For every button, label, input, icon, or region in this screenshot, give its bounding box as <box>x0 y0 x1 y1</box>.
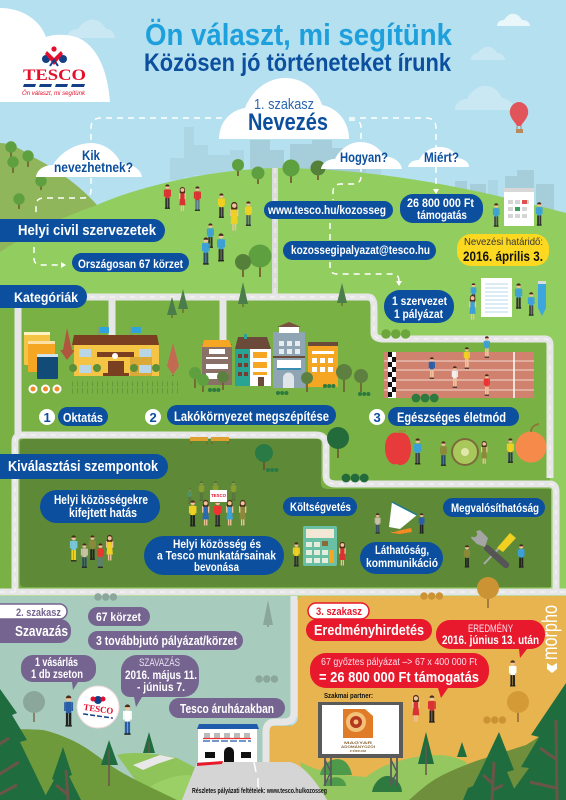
pill: Megvalósíthatóság <box>443 498 545 517</box>
deadline badge: 2016. április 3. <box>463 248 543 264</box>
road over zones <box>266 596 294 765</box>
pill: Helyi közösség és <box>144 536 284 575</box>
label: 3 Egészséges: Egészséges életmód <box>397 409 506 425</box>
pill: 3. szakasz <box>308 603 369 619</box>
label: 2 Lakókörnyezet: Lakókörnyezet megszépítése <box>174 408 329 424</box>
pill: Láthatóság: kommunikáció <box>366 556 438 570</box>
pill: támogatás: támogatás <box>417 208 467 222</box>
bubble: 1 vásárlás: 1 db zseton <box>31 667 83 681</box>
pill: email: kozossegipalyazat@tesco.hu <box>291 243 430 257</box>
icon: books <box>24 332 60 392</box>
cloud: Kik nevezhetnek <box>36 143 142 177</box>
people: first stage <box>164 184 252 265</box>
pill: 1 szervezet: 1 pályázat <box>394 307 443 321</box>
zone: voting <box>0 596 291 800</box>
icon: calculator with people <box>293 526 346 566</box>
pill: Helyi közösség és: bevonása <box>194 560 239 574</box>
trees on main hill <box>232 159 326 277</box>
bubble: total: = 26 800 000 Ft támogatás <box>319 669 479 686</box>
pill: Kategóriák <box>0 285 87 308</box>
pill: Szavazás <box>0 619 71 643</box>
pill: website: www.tesco.hu/kozosseg <box>267 203 386 217</box>
logo: Tesco: TESCO <box>23 67 86 84</box>
pill: Tesco áruházakban: Tesco áruházakban <box>180 701 274 716</box>
label: 1 Oktatás <box>39 407 108 426</box>
bubble: Szavazás dates: 2016. május 11. <box>125 668 197 682</box>
roads <box>0 168 566 592</box>
pill: website <box>264 201 393 219</box>
pill: 1 szervezet: 1 szervezet <box>392 294 447 308</box>
decorative clouds <box>67 14 530 110</box>
pill: Eredményhirdetés: Eredményhirdetés <box>314 622 424 639</box>
fruits and people <box>342 424 546 482</box>
pill: Láthatóság: Láthatóság, <box>375 543 429 557</box>
logo: Tesco: Ön választ, mi segítünk <box>22 90 86 97</box>
deadline badge: Nevezési határidő: <box>464 236 543 248</box>
label: Szakmai partner: Szakmai partner: <box>324 693 373 700</box>
token with people <box>64 686 132 735</box>
pine trees <box>0 683 566 800</box>
pill: 3. szakasz: 3. szakasz <box>316 606 362 618</box>
decorations: voting zone <box>23 593 278 722</box>
token with people: TESCO <box>83 702 114 716</box>
label: 1 Oktatás: Oktatás <box>63 410 103 425</box>
title <box>144 17 453 77</box>
pill: Kategóriák: Kategóriák <box>14 289 78 305</box>
title: Közösen jó történeteket írunk <box>144 49 451 77</box>
bubble: Eredmény date: EREDMÉNY <box>468 622 513 635</box>
benches and trees <box>190 427 349 472</box>
pines along road <box>167 282 410 339</box>
title: Ön választ, mi segítünk <box>145 17 453 52</box>
deadline badge <box>457 234 549 266</box>
bubble: total <box>310 653 489 698</box>
dashed connectors <box>34 118 439 286</box>
pill: Helyi közösség és: a Tesco munkatársainak <box>157 548 276 562</box>
people with Tesco sign <box>188 481 246 526</box>
pill: Helyi civil szervezetek: Helyi civil szervezetek <box>18 222 157 239</box>
pill: 67 körzet: 67 körzet <box>96 610 141 624</box>
pill: Helyi közösségekre: Helyi közösségekre <box>54 492 148 507</box>
bottom hills <box>0 720 566 800</box>
pill: Helyi civil szervezetek <box>0 219 165 242</box>
school <box>60 327 179 391</box>
calendar with people <box>493 188 543 227</box>
cloud: Nevezés: 1. szakasz <box>254 96 314 113</box>
pill: Kiválasztási szempontok <box>0 454 168 479</box>
pill: Költségvetés: Költségvetés <box>290 500 351 514</box>
cloud: Hogyan <box>321 142 402 169</box>
pill: Eredményhirdetés <box>306 619 432 641</box>
buildings <box>189 322 370 396</box>
billboard: ADOMÁNYOZÓI <box>341 744 375 749</box>
store <box>197 724 259 766</box>
icon: megaphone with people <box>375 502 425 534</box>
icon: tools with people <box>464 530 525 568</box>
footer note: Részletes pályázati feltételek: www.tesco.hu/kozosseg <box>192 788 327 795</box>
cloud: Miért <box>408 147 469 167</box>
bubble: Szavazás dates: SZAVAZÁS <box>139 656 180 669</box>
background: sky <box>0 0 566 300</box>
pill: Láthatóság <box>360 542 443 574</box>
people with Tesco sign: TESCO <box>211 493 226 498</box>
document with people and pencil <box>469 278 546 320</box>
left hill <box>0 143 97 260</box>
label: 3 Egészséges: 3 <box>374 410 381 425</box>
pill: 67 körzet <box>88 607 150 626</box>
label: 2 Lakókörnyezet: 2 <box>150 410 157 425</box>
logo: morpho <box>539 605 562 673</box>
main hill <box>0 168 566 600</box>
pill: továbbjutó: 3 továbbjutó pályázat/körzet <box>96 633 238 648</box>
logo: Tesco <box>22 46 86 97</box>
icon: hot air balloon <box>510 102 528 133</box>
billboard: MAGYAR <box>344 741 373 745</box>
pill: Tesco áruházakban <box>169 698 285 718</box>
pill: Országosan 67 körzet: Országosan 67 körzet <box>78 257 183 271</box>
billboard <box>318 702 403 792</box>
panel: selection criteria <box>20 439 551 587</box>
bubble: Eredmény date <box>436 620 545 658</box>
pill: Helyi közösségekre: kifejtett hatás <box>69 505 137 520</box>
logo cloud <box>0 8 110 102</box>
pill: támogatás: 26 800 000 Ft <box>407 196 474 210</box>
cloud: Nevezés: Nevezés <box>248 109 328 136</box>
people near results <box>412 660 516 723</box>
bubble: 1 vásárlás: 1 vásárlás <box>35 655 78 669</box>
pill: 2. szakasz: 2. szakasz <box>16 607 61 619</box>
pill: 1 szervezet <box>384 290 454 323</box>
cloud: Kik nevezhetnek: Kik <box>82 147 100 163</box>
cloud: Miért: Miért? <box>424 149 459 165</box>
running track <box>384 336 534 402</box>
cloud: Nevezés <box>219 78 349 139</box>
pill: Költségvetés <box>283 497 357 516</box>
pill: email <box>283 241 436 260</box>
bubble: Eredmény date: 2016. június 13. után <box>442 633 539 647</box>
pill: Helyi közösség és: Helyi közösség és <box>173 537 261 551</box>
trees on left hill <box>5 141 47 209</box>
cloud: Kik nevezhetnek: nevezhetnek? <box>54 159 133 175</box>
logo: morpho: morpho <box>539 605 562 660</box>
main road <box>133 755 327 800</box>
city skyline <box>170 127 554 214</box>
bubble: Szavazás dates <box>121 655 199 707</box>
pill: továbbjutó <box>88 631 243 650</box>
cloud: Hogyan: Hogyan? <box>340 149 388 165</box>
bubble: total: 67 győztes pályázat –> 67 x 400 000 Ft <box>321 657 477 668</box>
pill: Kiválasztási szempontok: Kiválasztási szempontok <box>8 458 159 475</box>
billboard: FÓRUM <box>350 748 367 753</box>
bubble: Szavazás dates: - június 7. <box>137 680 185 694</box>
bubble: 1 vásárlás <box>21 655 96 690</box>
decorations: results zone <box>420 577 529 724</box>
pill: Országosan 67 körzet <box>72 253 189 272</box>
label: 1 Oktatás: 1 <box>44 410 51 425</box>
zone: categories background <box>0 297 550 592</box>
zone: results <box>266 596 566 800</box>
pill: Helyi közösségekre <box>40 490 160 523</box>
group of community people <box>70 535 113 568</box>
pill: 2. szakasz <box>0 604 67 619</box>
label: 3 Egészséges <box>369 407 519 426</box>
label: 2 Lakókörnyezet <box>145 405 336 425</box>
pill: Megvalósíthatóság: Megvalósíthatóság <box>451 501 539 515</box>
pill: Szavazás: Szavazás <box>15 623 68 640</box>
pill: támogatás <box>400 194 483 223</box>
